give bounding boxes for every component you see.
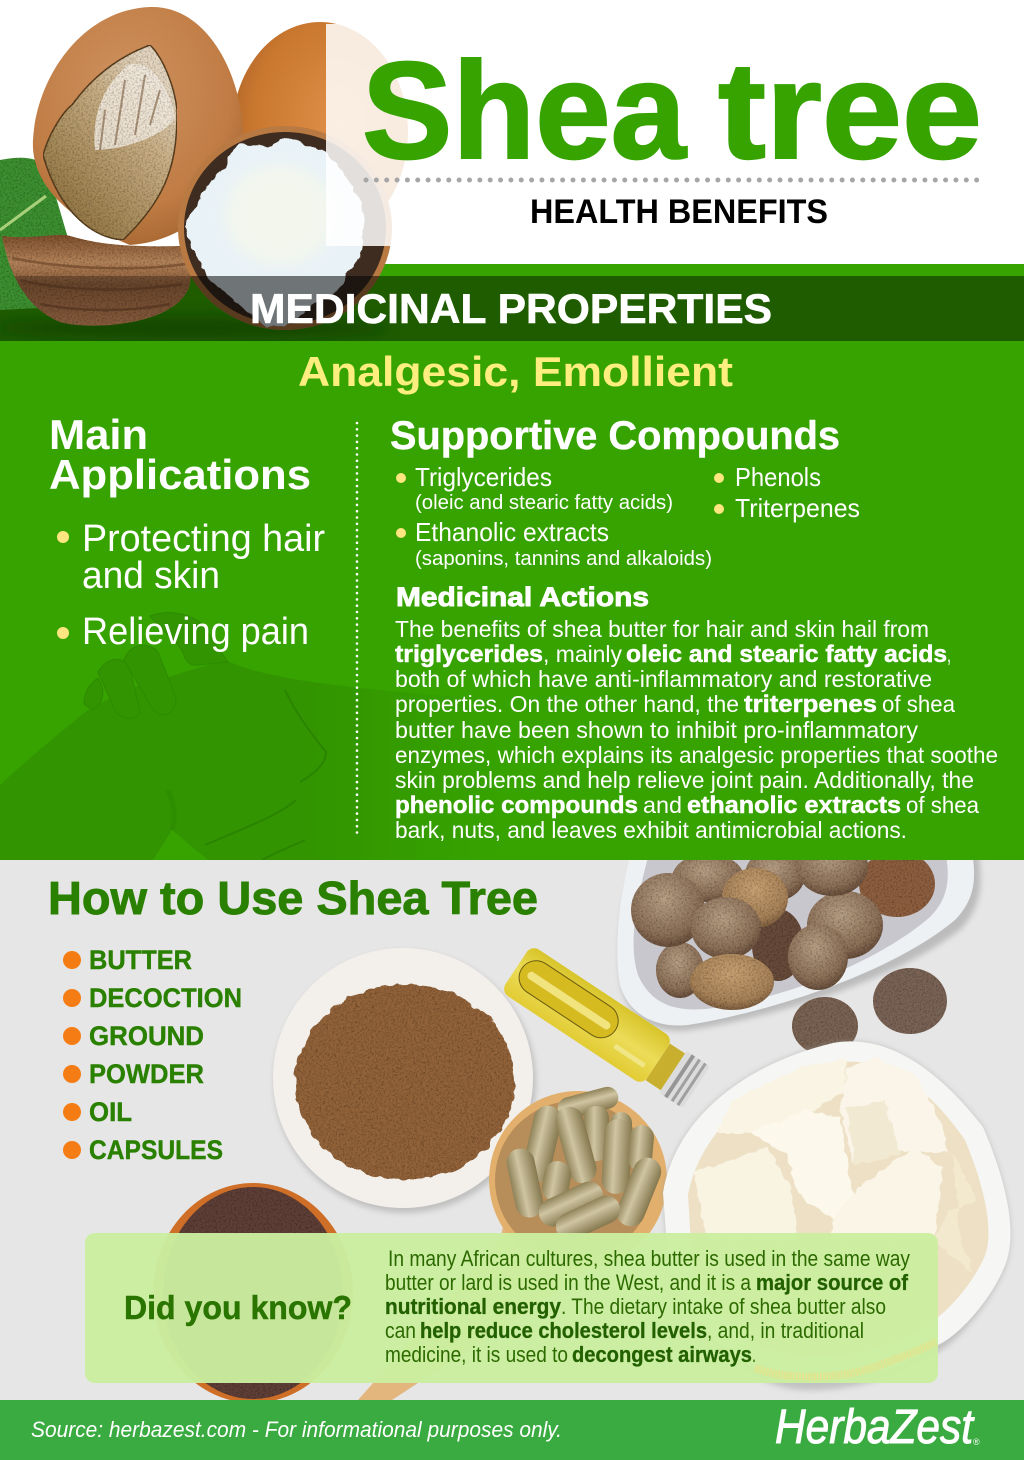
panel: main applications	[49, 411, 325, 653]
compound: ethanolic extracts: Ethanolic extracts	[415, 517, 609, 547]
lower half shell	[2, 235, 191, 326]
application: relieving pain: Relieving pain	[82, 611, 309, 653]
kernel highlight streaks	[94, 64, 175, 150]
text block: medicinal actions description: The benefits of shea butter for hair and skin hail from	[395, 616, 929, 642]
footer bar	[0, 1400, 1024, 1460]
image: shea nuts with butter	[0, 7, 408, 340]
text block: medicinal actions description	[395, 616, 998, 843]
text block: medicinal actions description: enzymes, which explains its analgesic properties that soothe	[395, 742, 998, 768]
text block: medicinal actions description: ethanolic extracts	[687, 792, 901, 819]
butter half shell	[178, 126, 392, 330]
application: protecting hair and skin	[57, 518, 325, 597]
image: shea nuts in white dish	[616, 860, 983, 1033]
form: ground: GROUND	[89, 1021, 204, 1051]
compound: ethanolic extracts: (saponins, tannins and alkaloids)	[415, 548, 712, 570]
heading: how to use: How to Use Shea Tree	[48, 872, 538, 924]
darkened area under band	[14, 276, 380, 330]
heading: main applications: Applications	[49, 451, 311, 498]
text block: medicinal actions description: , mainly	[543, 641, 622, 667]
compound: ethanolic extracts	[396, 517, 712, 570]
text block: medicinal actions description: butter have been shown to inhibit pro-inflammatory	[395, 717, 918, 743]
heading: main applications: Main	[49, 411, 148, 458]
form: oil	[63, 1097, 132, 1127]
callout text: In many African cultures, shea butter is used in the same way	[388, 1246, 910, 1271]
image: bowl of powder	[273, 948, 536, 1213]
text block: medicinal actions description: phenolic compounds	[395, 792, 638, 819]
text block: medicinal actions description: triglycerides	[395, 641, 543, 668]
text block: medicinal actions description: ,	[947, 641, 951, 667]
compound: triglycerides	[396, 462, 673, 514]
callout text: decongest airways	[572, 1342, 752, 1367]
heading: medicinal properties: MEDICINAL PROPERTIES	[250, 285, 772, 332]
panel: supportive compounds	[390, 414, 860, 570]
list: forms of use	[63, 945, 242, 1165]
form: capsules: CAPSULES	[89, 1135, 223, 1165]
image: spoon of capsules	[358, 1084, 667, 1400]
callout text: medicine, it is used to	[385, 1342, 568, 1367]
callout text	[385, 1246, 910, 1367]
callout text: butter or lard is used in the West, and it is a	[385, 1270, 752, 1295]
compound: phenols: Phenols	[735, 462, 821, 492]
heading: supportive compounds: Supportive Compounds	[390, 414, 840, 458]
logo: HerbaZest: ®	[973, 1437, 980, 1447]
logo: HerbaZest: HerbaZest	[775, 1401, 974, 1454]
subtitle: HEALTH BENEFITS	[530, 193, 828, 231]
translucent white title panel	[326, 24, 1024, 246]
image: oil bottle	[501, 945, 712, 1111]
compound: triglycerides: Triglycerides	[415, 462, 552, 492]
image: bowl of shea butter	[663, 1041, 1010, 1390]
source note: Source: herbazest.com - For informational purposes only.	[31, 1417, 562, 1442]
text block: medicinal actions description: and	[643, 792, 682, 818]
callout text: . The dietary intake of shea butter also	[561, 1294, 886, 1319]
compound: triglycerides: (oleic and stearic fatty acids)	[415, 492, 673, 514]
form: powder: POWDER	[89, 1059, 204, 1089]
text block: medicinal actions description: bark, nuts, and leaves exhibit antimicrobial actions.	[395, 817, 907, 843]
application: protecting hair and skin: Protecting hair	[82, 518, 325, 560]
callout text: help reduce cholesterol levels	[420, 1318, 707, 1343]
medicinal properties band background	[0, 264, 1024, 342]
properties list: Analgesic, Emollient	[298, 348, 733, 395]
callout heading: Did you know?	[124, 1289, 352, 1326]
exposed kernel	[43, 45, 177, 240]
title	[362, 34, 982, 188]
form: decoction: DECOCTION	[89, 983, 242, 1013]
shea butter	[183, 137, 364, 328]
image: loose nuts	[792, 968, 947, 1055]
big whole nut	[33, 7, 243, 245]
text block: medicinal actions description: both of which have anti-inflammatory and restorative	[395, 666, 932, 692]
heading: main applications	[49, 411, 311, 498]
form: oil: OIL	[89, 1097, 132, 1127]
text block: medicinal actions description: triterpenes	[744, 691, 877, 718]
nut shadow	[0, 316, 390, 340]
header background	[0, 0, 1024, 264]
panel: green properties background	[0, 342, 1024, 860]
heading: medicinal actions: Medicinal Actions	[396, 582, 649, 612]
icon: leaf	[0, 158, 70, 310]
compound: triterpenes: Triterpenes	[735, 493, 860, 523]
text block: medicinal actions description: of shea	[882, 691, 955, 717]
callout: did you know	[85, 1233, 938, 1383]
dotted column divider	[356, 423, 358, 838]
panel: how to use background	[0, 860, 1024, 1400]
callout text: major source of	[756, 1270, 909, 1295]
text block: medicinal actions description: of shea	[906, 792, 979, 818]
title: Shea	[362, 34, 687, 188]
application: protecting hair and skin: and skin	[82, 555, 220, 597]
text block: medicinal actions description: oleic and stearic fatty acids	[626, 641, 947, 668]
title: tree	[718, 34, 982, 188]
dotted title divider	[366, 178, 978, 182]
callout text: .	[752, 1342, 756, 1367]
callout text: can	[385, 1318, 416, 1343]
bowl rim artifact	[755, 1342, 936, 1377]
callout text: , and, in traditional	[707, 1318, 864, 1343]
panel: medicinal actions	[395, 582, 998, 843]
form: butter: BUTTER	[89, 945, 192, 975]
image: hands on knee silhouette	[0, 613, 500, 860]
text block: medicinal actions description: skin problems and help relieve joint pain. Additionally, the	[395, 767, 974, 793]
callout text: nutritional energy	[385, 1294, 562, 1319]
text block: medicinal actions description: properties. On the other hand, the	[395, 691, 739, 717]
image: bowl of ground bark	[153, 1183, 353, 1403]
back nut	[232, 22, 408, 242]
